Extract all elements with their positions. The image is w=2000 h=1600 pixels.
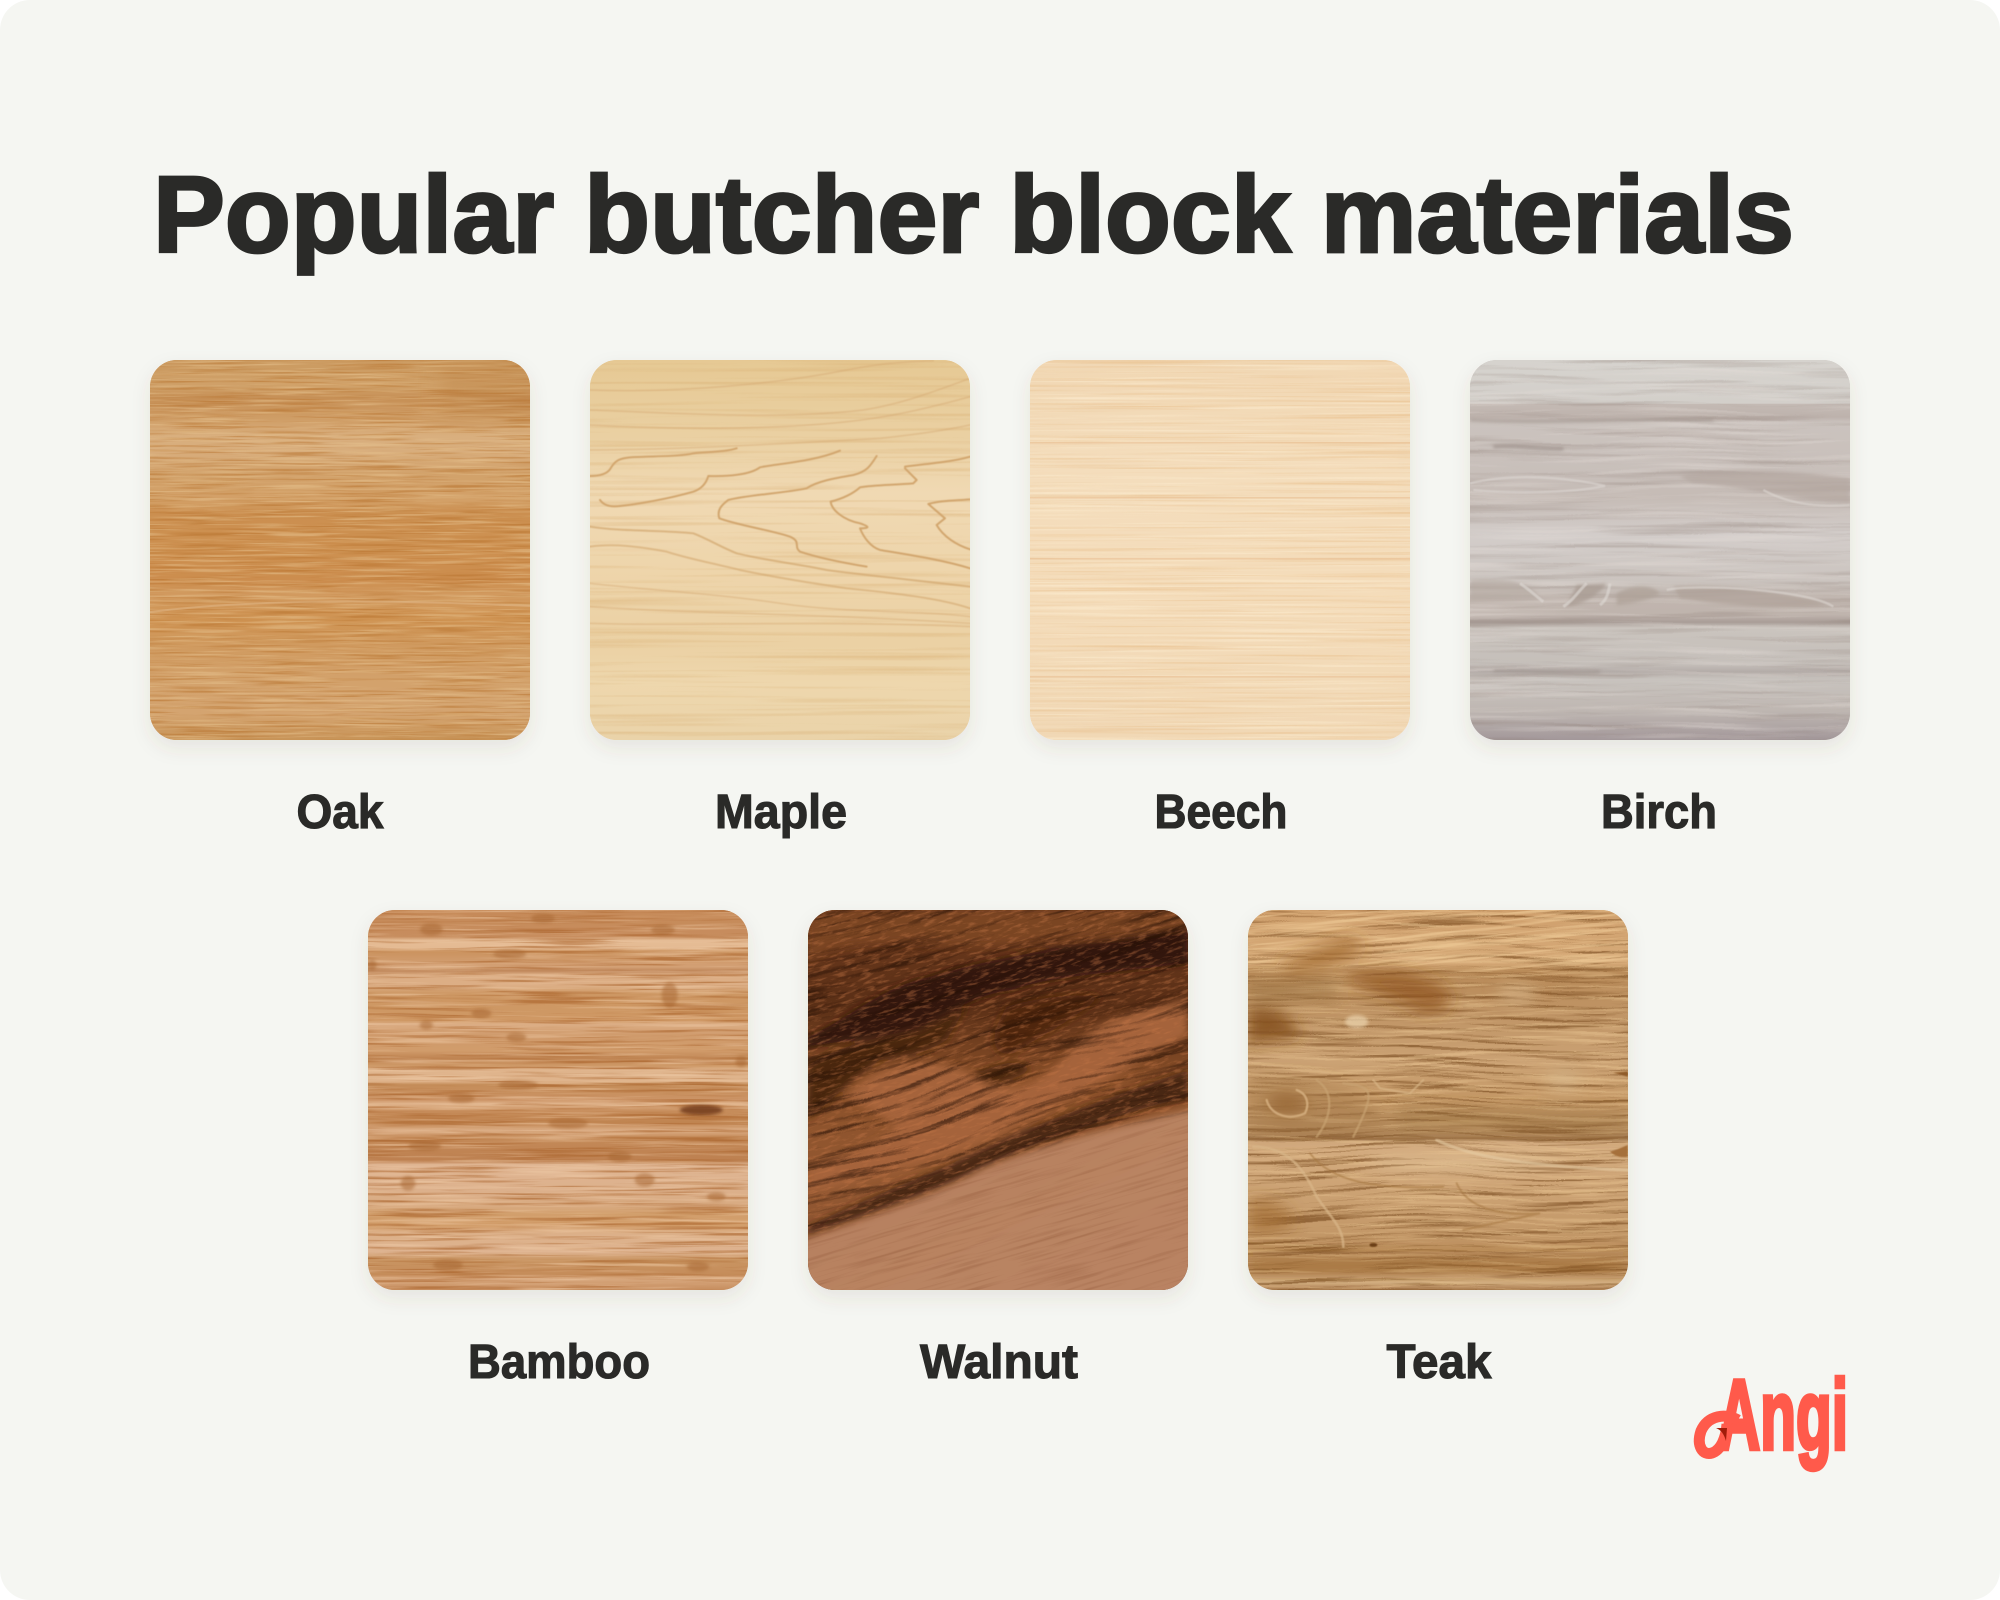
panel: teak [1244,910,1632,1379]
panel: bamboo [367,910,748,1389]
logo: Angi [1699,1359,1848,1470]
title: Popular butcher block materials [153,154,1794,276]
swatch: bamboo wood texture [367,910,748,1290]
swatch: maple wood texture [590,360,970,740]
label: maple: Maple [715,786,847,839]
panel: birch [1470,360,1850,839]
label: birch: Birch [1601,786,1717,839]
swatch: walnut wood texture [808,910,1188,1290]
panel: walnut [804,910,1192,1379]
swatch: birch wood texture [1470,360,1850,740]
label: beech: Beech [1154,786,1288,839]
label: bamboo: Bamboo [468,1336,650,1389]
panel: oak [150,360,550,839]
logo: Angi: Angi [1718,1359,1848,1470]
label: oak: Oak [296,786,384,839]
swatch: beech wood texture [1030,360,1410,740]
logo fold accent [1716,1428,1727,1441]
logo loop [1699,1416,1738,1454]
label: walnut: Walnut [920,1336,1078,1389]
panel: maple [590,360,970,839]
label: teak: Teak [1386,1336,1492,1389]
panel: beech [1030,360,1410,839]
swatch: oak wood texture [150,360,550,740]
swatch: teak wood texture [1248,910,1628,1290]
